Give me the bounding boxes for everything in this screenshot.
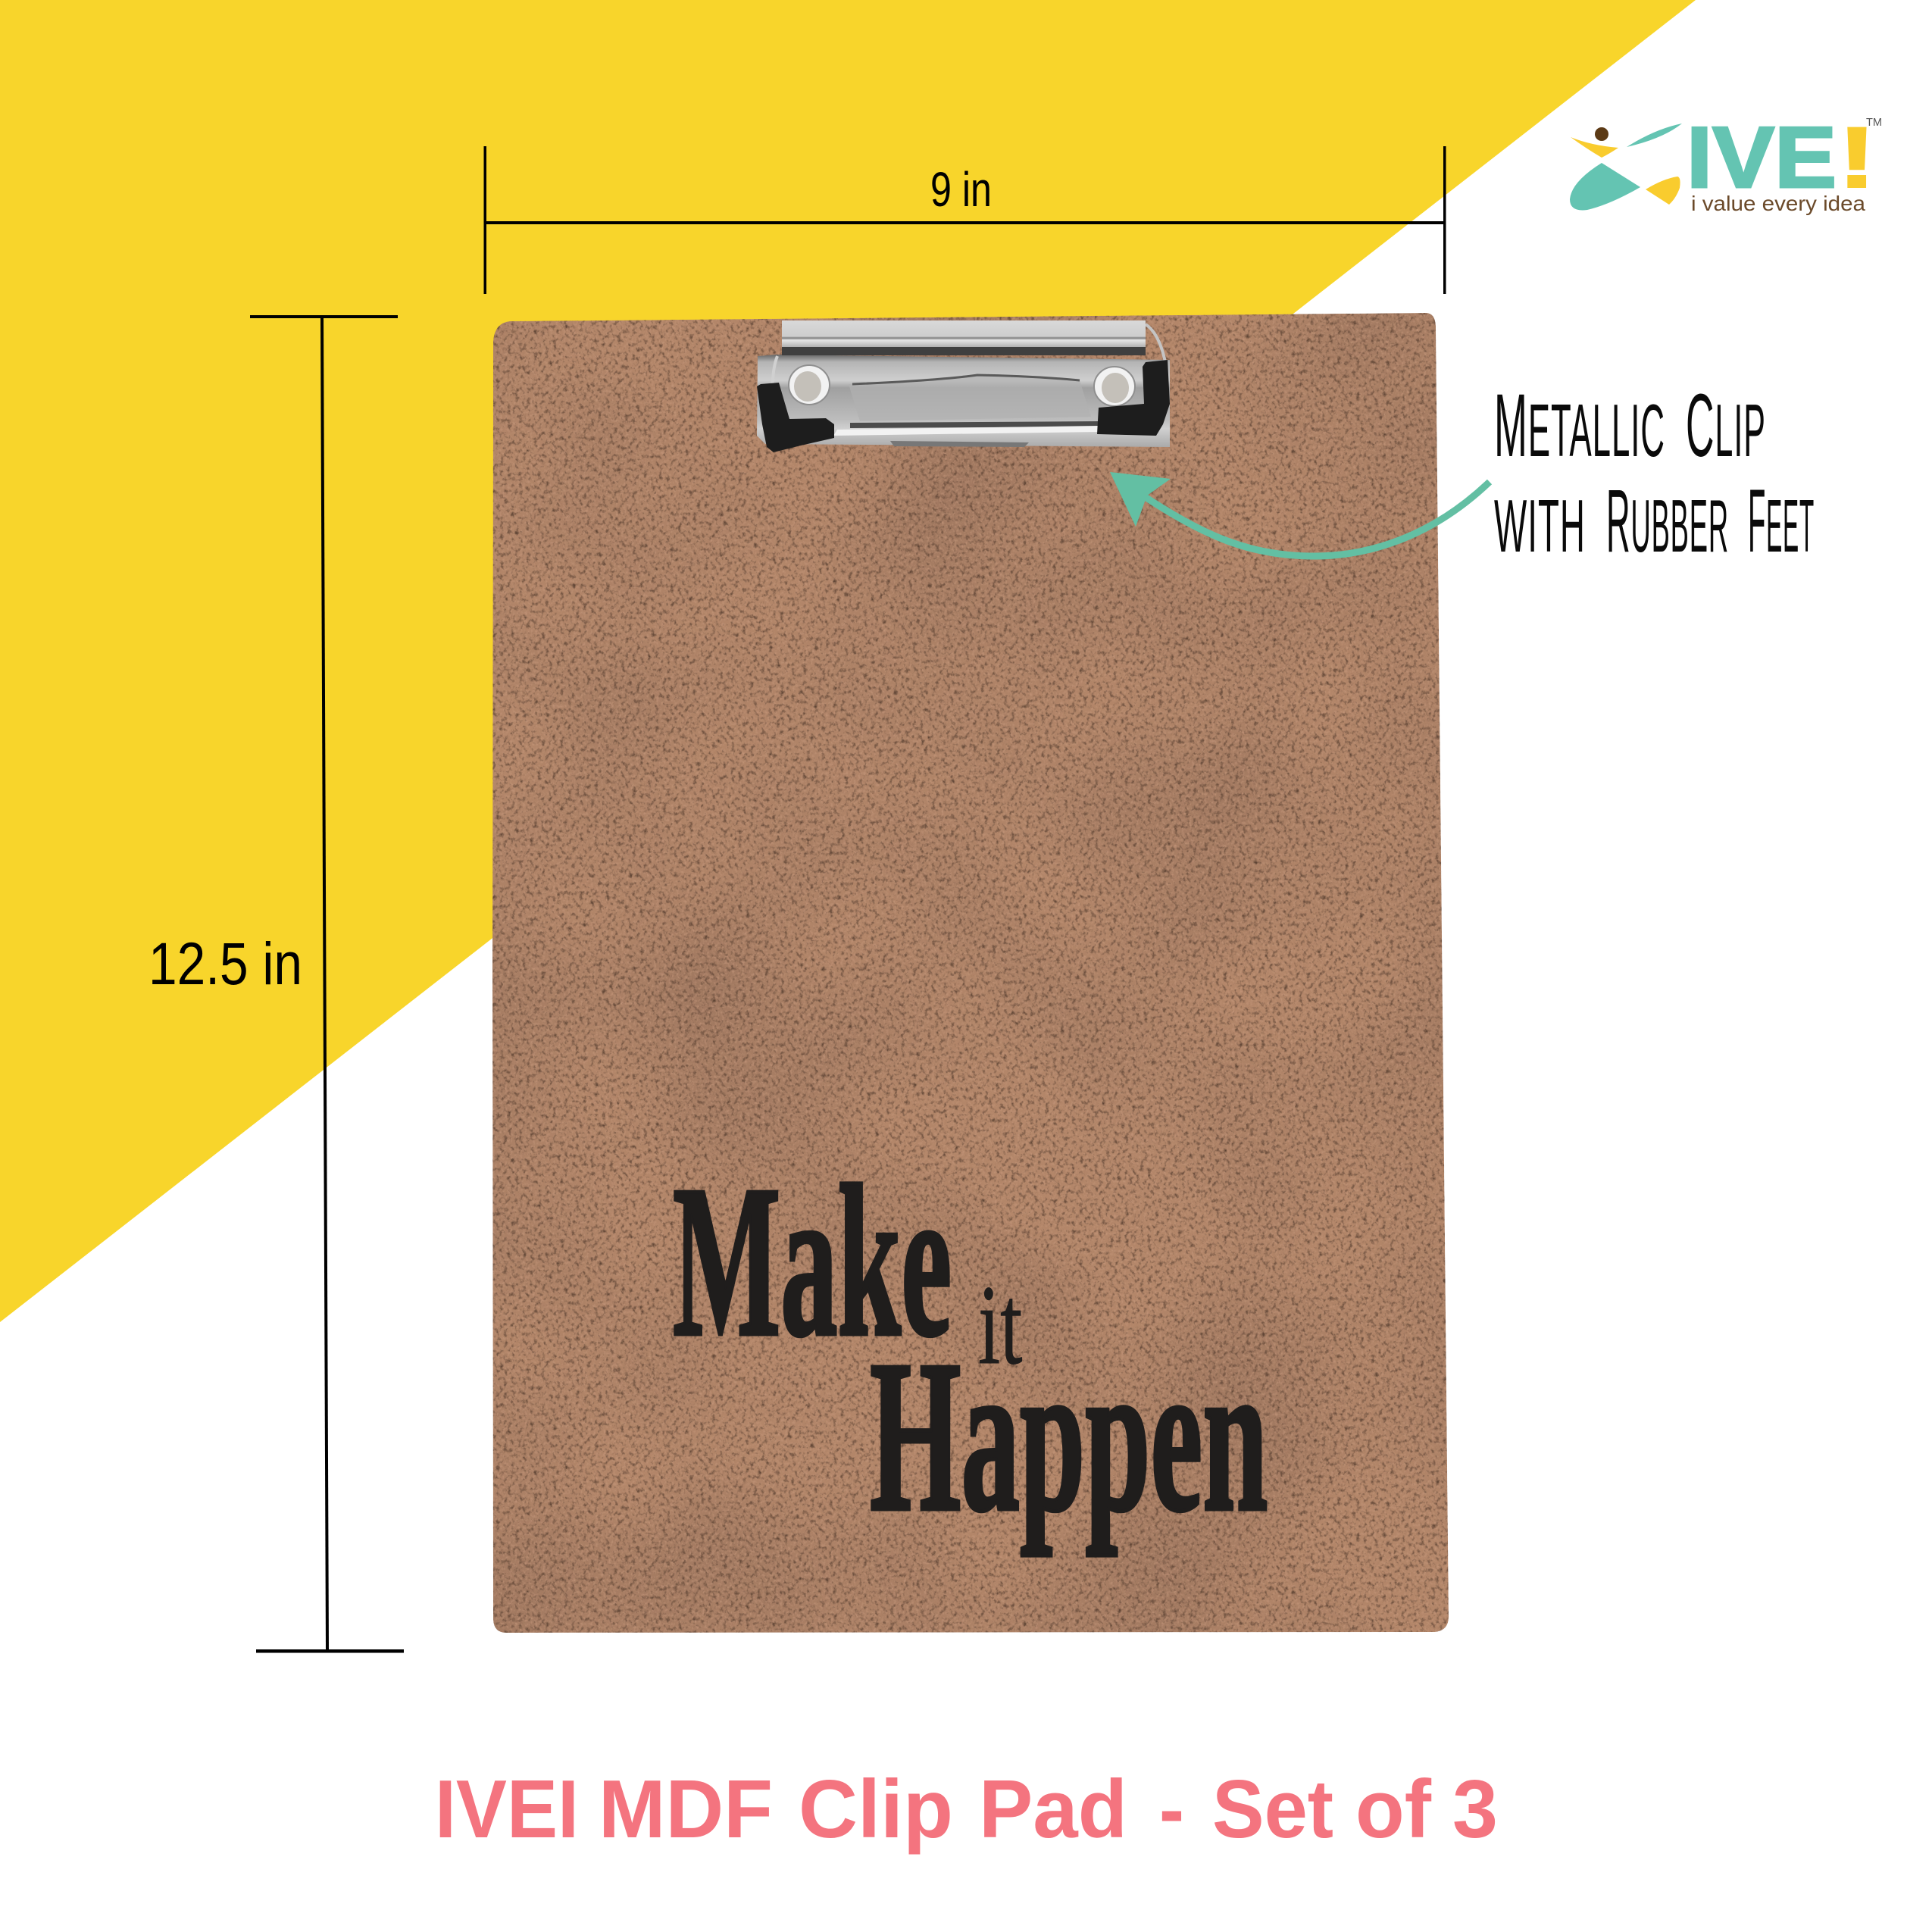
IVEI logo (1570, 110, 1882, 215)
board surface (492, 313, 1449, 1633)
logo wordmark: IVE (1687, 110, 1837, 206)
logo exclamation mark: ! (1837, 110, 1877, 206)
title: Clip (799, 1763, 953, 1855)
right rivet (1094, 367, 1135, 406)
logo tagline: i value every idea (1691, 192, 1865, 215)
title: MDF (599, 1763, 773, 1855)
callout: metallic clip with rubber feet (1494, 376, 1815, 571)
printed slogan: Happen (870, 1315, 1268, 1556)
left rivet (789, 365, 830, 405)
printed slogan: Make (673, 1141, 952, 1382)
text: FEET (1748, 471, 1815, 571)
callout: metallic clip with rubber feet: CLIP (1686, 376, 1766, 476)
right rubber foot (1097, 360, 1170, 436)
green arrow pointing to clip (1110, 472, 1490, 556)
title: Set (1212, 1763, 1333, 1855)
printed slogan (673, 1141, 1268, 1556)
logo figure icon (1570, 123, 1682, 210)
title: - (1159, 1763, 1184, 1855)
callout: metallic clip with rubber feet: METALLIC (1494, 376, 1665, 476)
height dimension: 12.5 in (148, 315, 404, 1653)
trademark: TM (1866, 116, 1882, 129)
printed slogan: it (978, 1263, 1022, 1389)
callout: metallic clip with rubber feet: RUBBER (1606, 471, 1729, 571)
title (435, 1763, 1498, 1855)
title: IVEI (435, 1763, 579, 1855)
left rubber foot (757, 383, 834, 452)
callout: metallic clip with rubber feet: WITH (1494, 484, 1586, 567)
yellow diagonal background (0, 0, 1696, 1322)
title: Pad (979, 1763, 1127, 1855)
height dimension: 12.5 in: 12.5 in (148, 930, 302, 997)
width dimension: 9 in: 9 in (930, 162, 992, 217)
MDF clipboard (492, 313, 1449, 1633)
title: 3 (1452, 1763, 1498, 1855)
width dimension: 9 in (483, 146, 1446, 294)
title: of (1355, 1763, 1432, 1855)
metallic clip (757, 320, 1170, 452)
plate reflection (849, 374, 1091, 421)
